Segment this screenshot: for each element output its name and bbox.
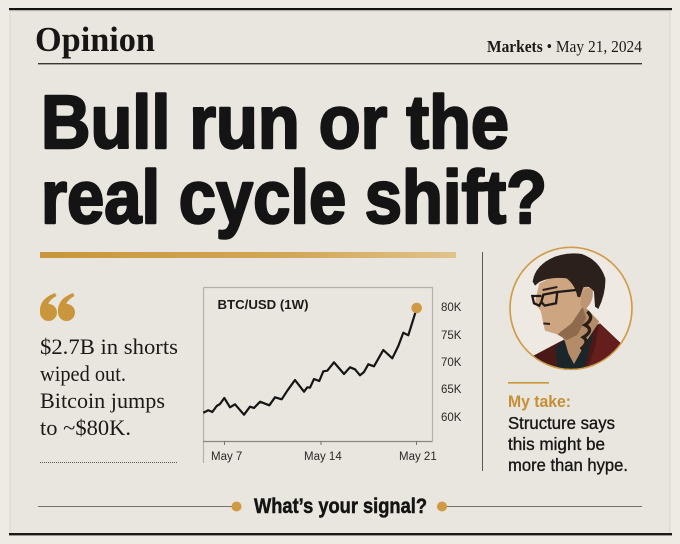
gold divider bar (40, 252, 456, 258)
y axis labels: 65K (441, 384, 462, 396)
x axis labels: May 21 (399, 451, 437, 463)
headline: Bull run or the (41, 80, 509, 164)
x axis labels: May 7 (211, 451, 242, 463)
x axis labels: May 14 (304, 451, 342, 463)
ear (580, 288, 593, 309)
prompt text: What’s your signal? (254, 495, 427, 518)
neck (559, 303, 599, 364)
quote text: to ~$80K. (40, 415, 131, 440)
hair (533, 253, 605, 309)
y axis labels (441, 302, 462, 424)
eyebrow and mouth (543, 287, 557, 324)
my take callout (508, 382, 628, 475)
headline: real cycle shift? (41, 155, 547, 239)
callout text: Structure says (508, 413, 615, 433)
left dot (232, 502, 242, 512)
quote text: Bitcoin jumps (40, 388, 165, 413)
callout text: this might be (508, 434, 605, 454)
icon: author portrait (510, 247, 632, 373)
y axis labels: 70K (441, 357, 462, 369)
price line (203, 308, 417, 415)
footer prompt (38, 495, 642, 518)
x axis labels (211, 451, 437, 463)
y axis labels: 60K (441, 412, 462, 424)
callout text (508, 413, 628, 475)
callout text: more than hype. (508, 455, 628, 475)
glasses (532, 290, 576, 306)
shirt (555, 334, 594, 369)
section name: Opinion (35, 20, 155, 59)
face (535, 272, 588, 334)
chart title: BTC/USD (1W) (218, 297, 308, 312)
chart: BTC/USD weekly line (203, 288, 462, 463)
y axis labels: 80K (441, 302, 462, 314)
right dot (437, 502, 447, 512)
quote text: $2.7B in shorts (40, 334, 178, 359)
quote column (40, 293, 178, 462)
dateline: Markets • May 21, 2024 (487, 37, 642, 56)
quote text: wiped out. (40, 361, 126, 386)
callout label: My take: (508, 392, 571, 411)
latest price marker (411, 303, 422, 313)
icon: quotation mark (40, 293, 75, 321)
headline (41, 80, 547, 239)
neck tattoo (581, 312, 591, 349)
masthead (35, 20, 642, 59)
y axis labels: 75K (441, 330, 462, 342)
jacket (534, 323, 620, 369)
quote text (40, 334, 178, 440)
